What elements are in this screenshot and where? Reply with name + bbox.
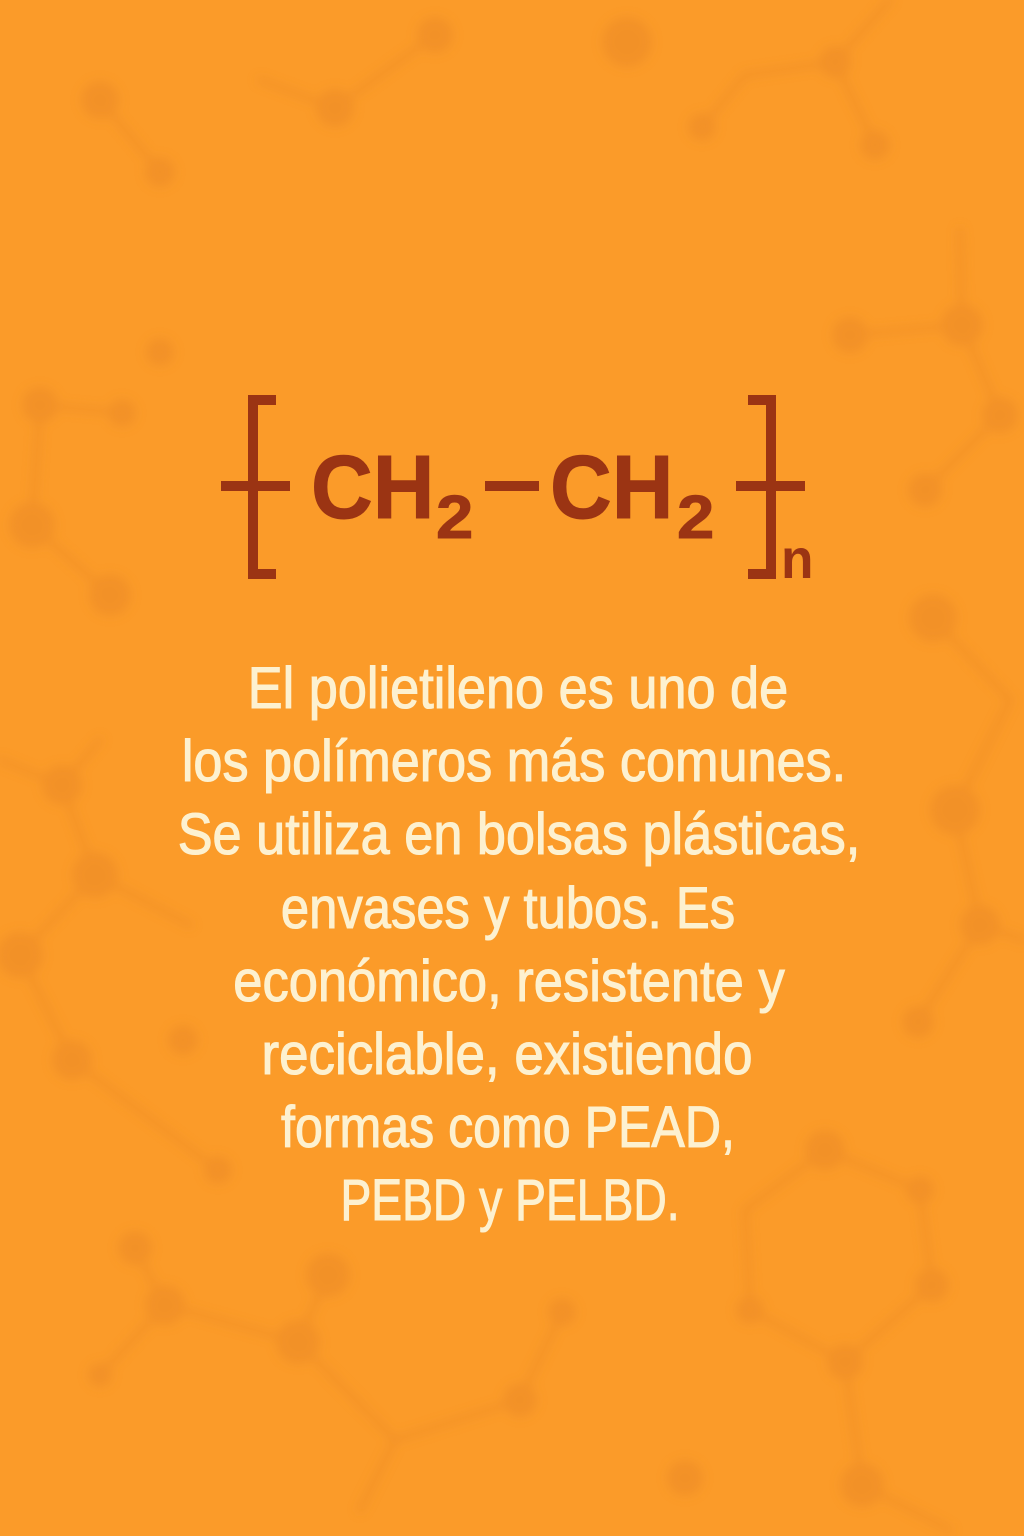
right bracket — [736, 400, 805, 574]
description text block — [178, 656, 860, 1233]
second CH2 group: 2 — [677, 483, 714, 551]
description text block: envases y tubos. Es — [281, 876, 735, 941]
first CH2 group: CH — [311, 437, 434, 537]
description text block: El polietileno es uno de — [247, 656, 788, 721]
subscript n: n — [781, 528, 813, 590]
bond between CH2 groups — [485, 481, 539, 491]
first CH2 group — [311, 437, 473, 551]
left bracket — [221, 400, 290, 574]
description text block: PEBD y PELBD. — [340, 1168, 679, 1233]
description text block: reciclable, existiendo — [261, 1022, 753, 1087]
description text block: los polímeros más comunes. — [181, 729, 846, 794]
description text block: Se utiliza en bolsas plásticas, — [178, 802, 860, 867]
second CH2 group: CH — [550, 437, 673, 537]
description text block: económico, resistente y — [233, 949, 785, 1014]
second CH2 group — [550, 437, 714, 551]
first CH2 group: 2 — [436, 483, 473, 551]
description text block: formas como PEAD, — [281, 1095, 734, 1160]
